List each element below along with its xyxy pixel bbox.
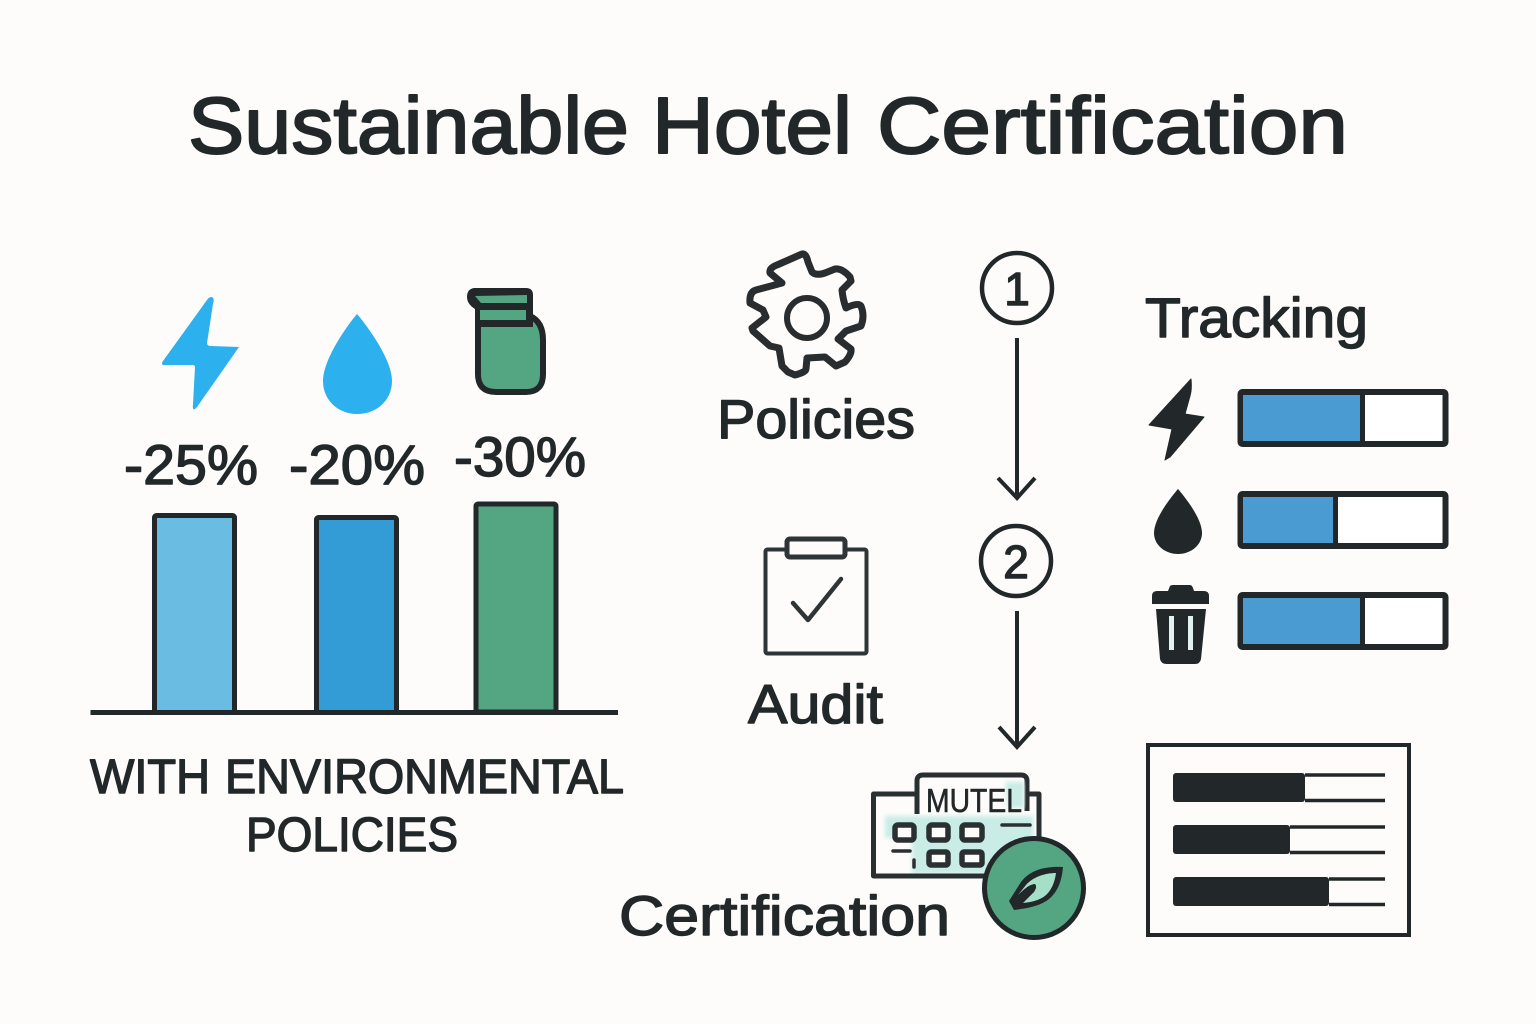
panel: environmental reduction chart bbox=[90, 288, 624, 862]
label: audit: Audit bbox=[748, 673, 883, 735]
chart baseline bbox=[90, 710, 618, 715]
title: Hotel bbox=[652, 81, 852, 170]
icon: audit clipboard bbox=[766, 539, 866, 654]
panel: report card bbox=[1148, 745, 1409, 935]
step marker 1: 1 bbox=[1004, 263, 1030, 315]
arrow: step 1 to step 2 bbox=[998, 338, 1035, 498]
icon: blue lightning bolt bbox=[162, 297, 239, 409]
title: Certification bbox=[877, 81, 1348, 170]
progress row: water bbox=[1240, 494, 1446, 546]
chart caption: ENVIRONMENTAL bbox=[225, 751, 624, 804]
report row 3 bbox=[1173, 877, 1385, 906]
value: energy reduction: -25% bbox=[124, 433, 258, 496]
title: Sustainable bbox=[188, 81, 629, 170]
bar: energy bbox=[154, 516, 234, 712]
icon: blue water drop bbox=[323, 314, 392, 414]
report frame bbox=[1148, 745, 1409, 935]
report row 2 bbox=[1173, 825, 1385, 854]
step marker 2 bbox=[981, 526, 1051, 596]
label: policies: Policies bbox=[717, 388, 915, 450]
heading: tracking: Tracking bbox=[1145, 286, 1368, 349]
bar: water bbox=[316, 518, 396, 712]
value: waste reduction: -30% bbox=[454, 425, 586, 488]
label: certification: Certification bbox=[619, 884, 950, 947]
panel: certification process bbox=[619, 253, 1084, 947]
chart caption bbox=[90, 751, 624, 862]
icon: dark trash can bbox=[1152, 585, 1209, 664]
title bbox=[188, 81, 1348, 170]
chart caption: WITH bbox=[90, 751, 210, 804]
report row 1 bbox=[1173, 773, 1385, 802]
icon: green leaf badge bbox=[984, 838, 1084, 938]
icon: green waste container bbox=[467, 288, 543, 392]
chart caption: POLICIES bbox=[246, 809, 458, 862]
progress row: waste bbox=[1240, 595, 1446, 647]
icon: certified hotel: MUTEL bbox=[926, 782, 1022, 819]
bar: waste bbox=[476, 504, 556, 712]
progress row: energy bbox=[1240, 392, 1446, 444]
arrow: step 2 to certification bbox=[999, 611, 1035, 747]
icon: certified hotel bbox=[874, 775, 1039, 876]
icon: policies gear bbox=[750, 254, 863, 375]
value: water reduction: -20% bbox=[289, 433, 425, 496]
step marker 2: 2 bbox=[1003, 536, 1029, 588]
step marker 1 bbox=[982, 253, 1052, 323]
icon: dark lightning bolt bbox=[1149, 379, 1204, 460]
icon: dark water drop bbox=[1154, 489, 1202, 554]
panel: tracking bbox=[1145, 286, 1446, 664]
